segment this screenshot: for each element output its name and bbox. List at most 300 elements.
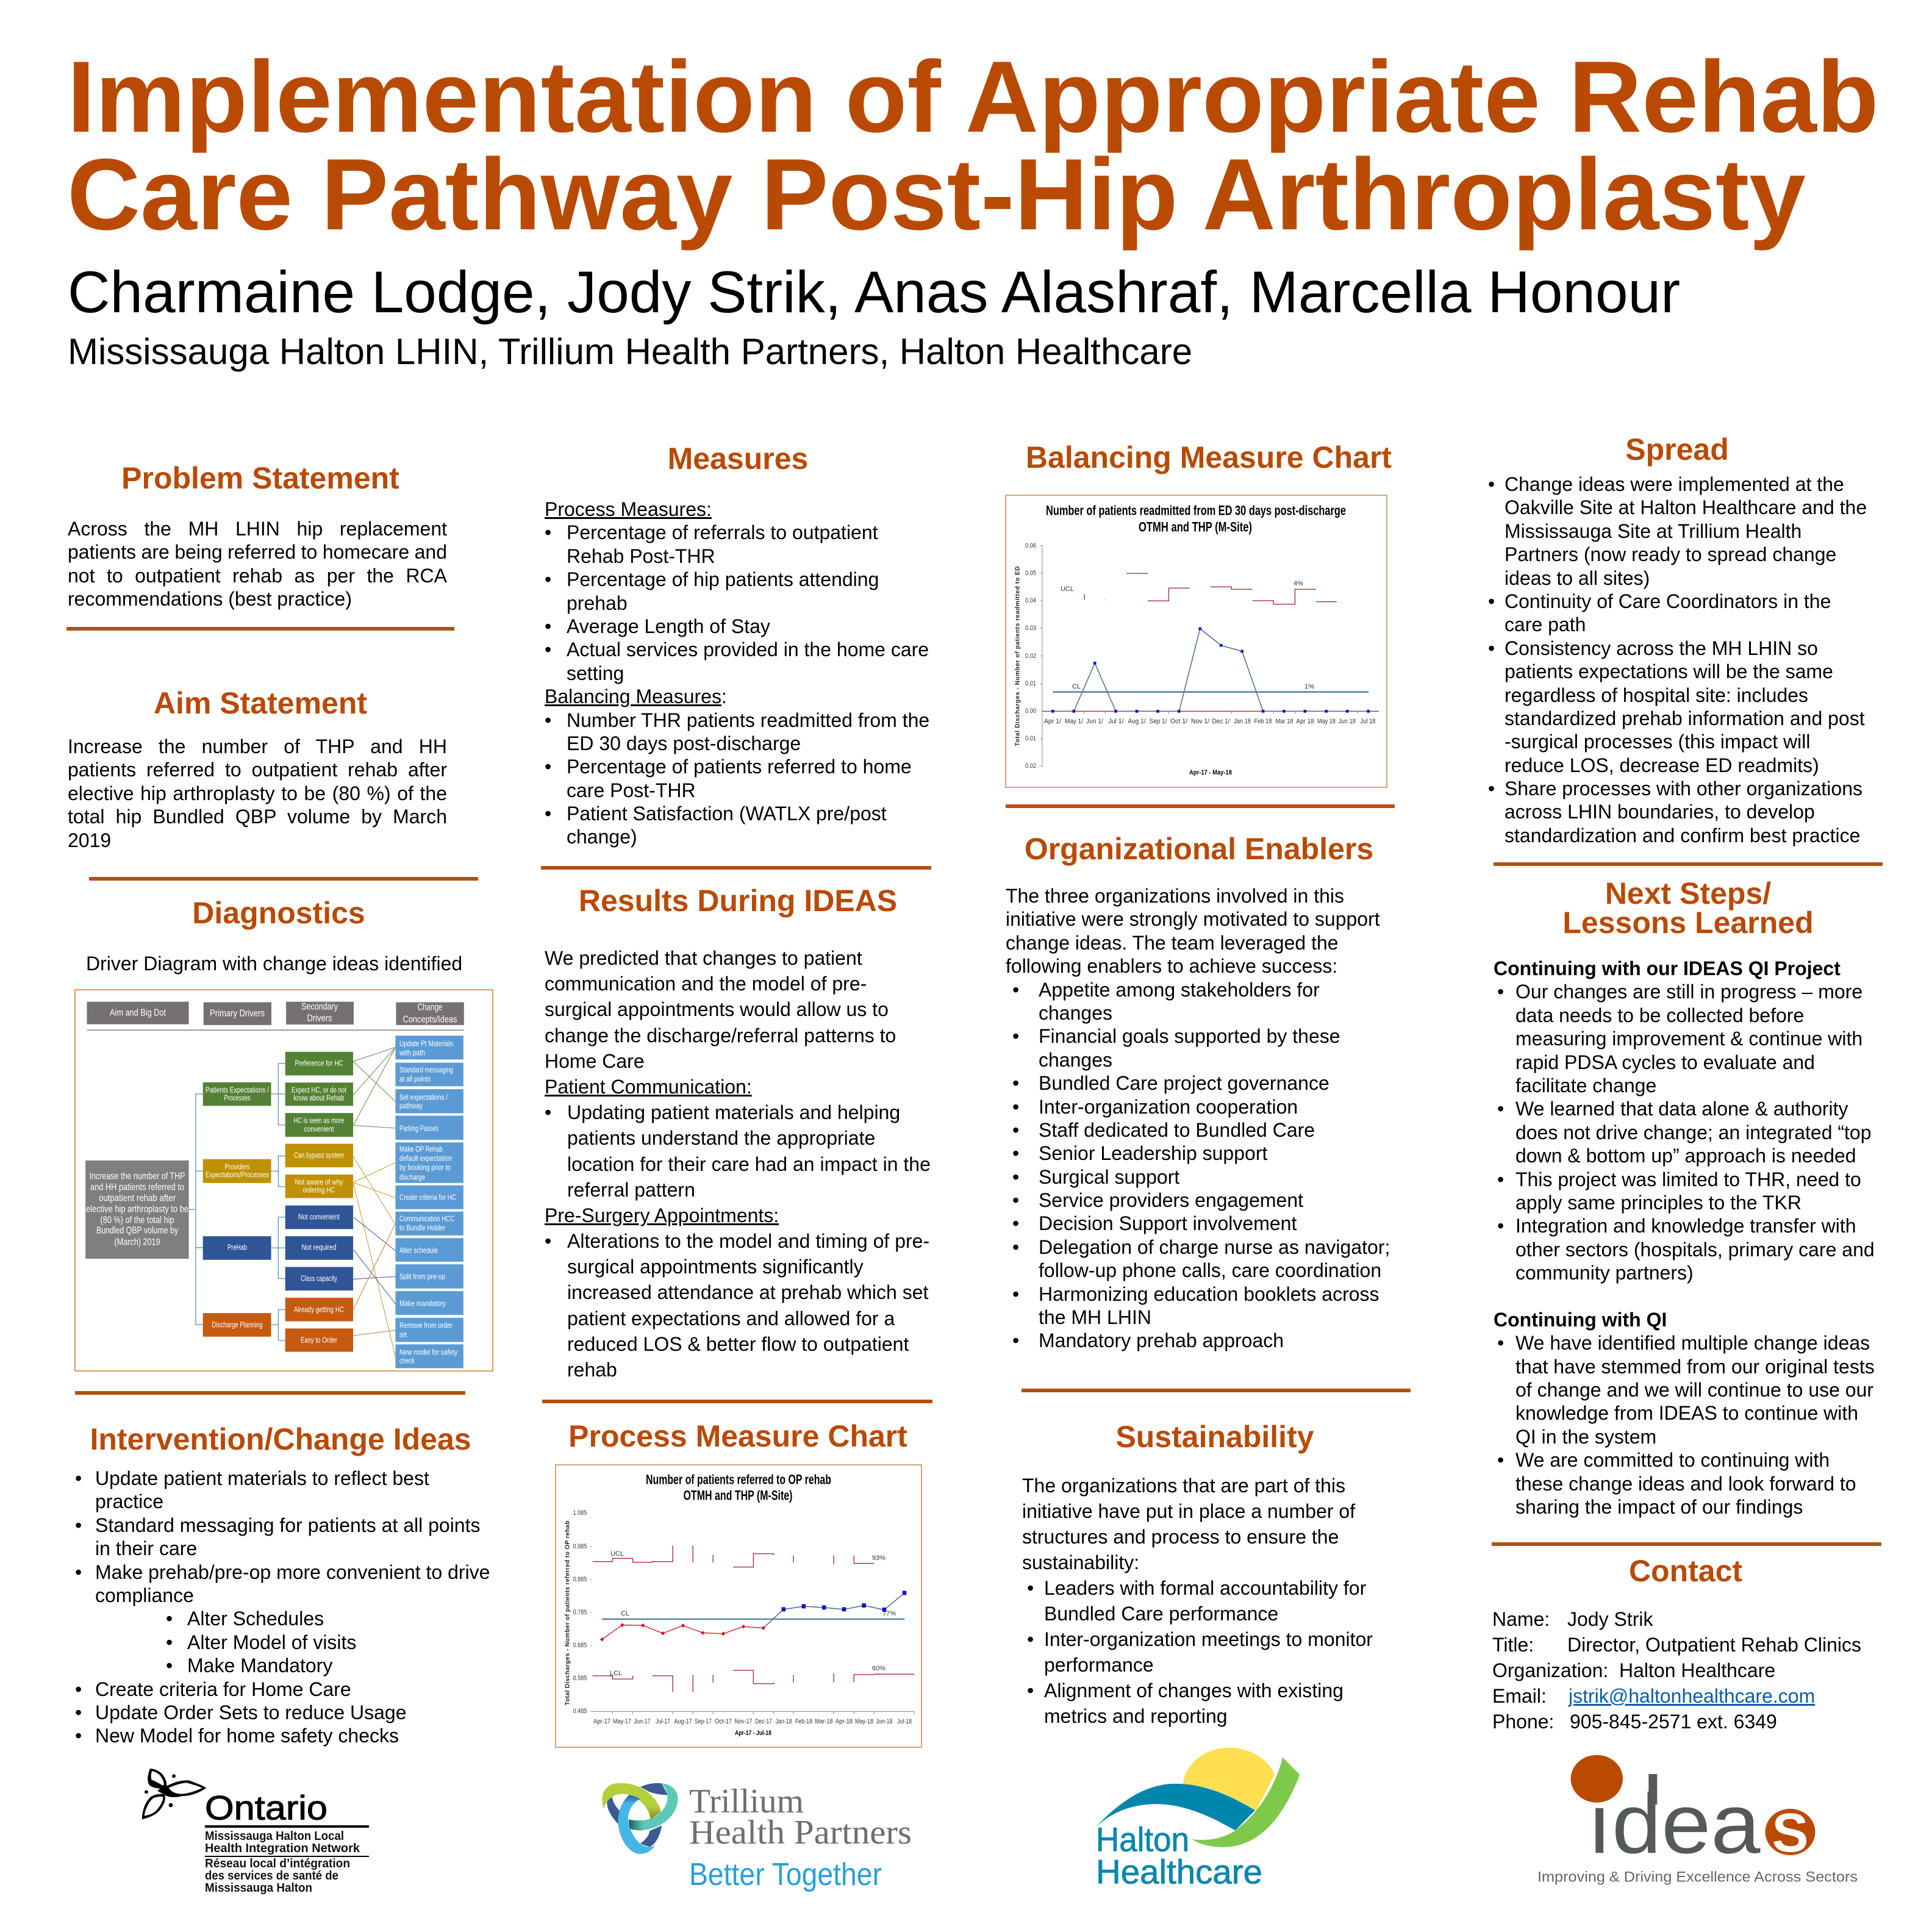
- chart: driver diagram: Preference for HC: [295, 1059, 343, 1067]
- list: spread: reduce LOS, decrease ED readmits): [1504, 754, 1819, 776]
- chart: process measure run chart: Sep-17: [695, 1718, 712, 1725]
- text: contact details: Director, Outpatient Rehab Clinics: [1567, 1634, 1861, 1656]
- text: results: location for their care had an impact in the: [567, 1153, 931, 1175]
- list: measures: •: [545, 615, 551, 637]
- list: organizational enablers: Staff dedicated to Bundled Care: [1039, 1119, 1315, 1141]
- list: organizational enablers: The three organizations involved in this: [1006, 885, 1344, 907]
- chart: driver diagram: Primary Drivers: [210, 1009, 265, 1018]
- chart: driver diagram: Discharge Planning: [212, 1320, 262, 1329]
- list: organizational enablers: Financial goals supported by these: [1039, 1025, 1340, 1047]
- list: next steps: •: [1497, 981, 1504, 1003]
- chart: process measure run chart: Jul-18: [897, 1718, 912, 1725]
- chart: process measure run chart: Apr-17: [593, 1718, 610, 1725]
- chart: driver diagram: HC is seen as more: [294, 1116, 344, 1125]
- chart: driver diagram: Easy to Order: [301, 1336, 337, 1344]
- list: spread: Change ideas were implemented at the: [1504, 473, 1844, 495]
- list: measures: Number THR patients readmitted from the: [567, 709, 929, 731]
- chart: driver diagram: PreHab: [227, 1243, 247, 1251]
- list: measures: Percentage of hip patients attending: [567, 568, 879, 590]
- text: contact details: Name:: [1492, 1608, 1550, 1630]
- list: change ideas: •: [166, 1631, 173, 1653]
- title: [67, 40, 1879, 251]
- chart: balancing measure run chart: Apr 18: [1297, 718, 1314, 725]
- chart: balancing measure run chart: Mar 18: [1276, 718, 1293, 725]
- list: measures: [545, 498, 929, 848]
- list: next steps: knowledge from IDEAS to continue with: [1515, 1402, 1858, 1424]
- logo: Ontario Mississauga Halton LHIN: [142, 1769, 369, 1895]
- chart: driver diagram: Already getting HC: [294, 1305, 344, 1314]
- list: organizational enablers: •: [1012, 1329, 1019, 1351]
- text: results: rehab: [567, 1359, 617, 1381]
- text: results: surgical appointments significantly: [567, 1256, 864, 1278]
- text: problem statement: not to outpatient rehab as per the RCA: [68, 565, 447, 587]
- heading: Diagnostics: Diagnostics: [192, 896, 365, 930]
- chart: driver diagram: at all points: [399, 1075, 431, 1083]
- chart: driver diagram: convenient: [304, 1125, 334, 1133]
- list: spread: patients expectations will be the same: [1504, 660, 1833, 682]
- chart: driver diagram: outpatient rehab after: [99, 1193, 176, 1204]
- chart: balancing measure run chart: 0.00: [1025, 707, 1036, 715]
- list: spread: regardless of hospital site: includes: [1504, 684, 1808, 706]
- chart: driver diagram: Alter schedule: [399, 1245, 438, 1255]
- chart: process measure run chart: Mar-18: [815, 1718, 833, 1725]
- list: spread: •: [1488, 637, 1495, 659]
- chart: driver diagram: check: [399, 1356, 415, 1365]
- list: next steps: apply same principles to the TKR: [1515, 1192, 1801, 1214]
- heading: Problem Statement: Problem Statement: [121, 461, 399, 495]
- list: spread: -surgical processes (this impact will: [1504, 731, 1810, 753]
- chart: driver diagram: Secondary: [301, 1001, 338, 1012]
- list: sustainability: structures and process to ensure the: [1022, 1526, 1339, 1548]
- list: organizational enablers: Service providers engagement: [1039, 1189, 1303, 1211]
- list: measures: Percentage of referrals to outpatient: [567, 521, 878, 543]
- heading: Measures: Measures: [668, 442, 808, 476]
- chart: process measure run chart: 0.485: [573, 1708, 587, 1715]
- list: organizational enablers: •: [1012, 1166, 1019, 1188]
- chart: driver diagram: Standard messaging: [399, 1065, 453, 1075]
- list: change ideas: Create criteria for Home Care: [95, 1678, 351, 1700]
- logo: IDEAS: ıdea: [1587, 1776, 1761, 1871]
- text: contact details: Title:: [1492, 1634, 1534, 1656]
- chart: balancing measure run chart: 0.04: [1025, 597, 1036, 604]
- heading: Sustainability: Sustainability: [1115, 1420, 1314, 1454]
- text: problem statement: Across the MH LHIN hip replacement: [68, 518, 447, 540]
- list: next steps: that have stemmed from our original tests: [1515, 1356, 1875, 1378]
- list: organizational enablers: Mandatory prehab approach: [1039, 1329, 1284, 1351]
- chart: process measure run chart: 60%: [872, 1665, 886, 1672]
- list: measures: care Post-THR: [567, 779, 696, 801]
- list: change ideas: •: [75, 1725, 82, 1747]
- list: next steps: of change and we will continue to use our: [1515, 1379, 1873, 1401]
- list: measures: Rehab Post-THR: [567, 545, 715, 567]
- text: problem statement: [68, 518, 447, 610]
- text: results: change the discharge/referral patterns to: [545, 1025, 896, 1046]
- list: next steps: •: [1497, 1449, 1504, 1471]
- chart: balancing measure run chart: 4%: [1293, 580, 1303, 587]
- text: results: Home Care: [545, 1050, 645, 1072]
- list: next steps: Integration and knowledge transfer with: [1515, 1215, 1856, 1237]
- chart: driver diagram: Parking Passes: [399, 1123, 438, 1133]
- list: next steps: [1494, 957, 1884, 1519]
- chart: process measure run chart: Nov-17: [734, 1718, 753, 1725]
- icon: trillium: [142, 1769, 206, 1819]
- list: organizational enablers: •: [1012, 1142, 1019, 1164]
- text: aim statement: [68, 735, 447, 851]
- list: next steps: does not drive change; an integrated “top: [1515, 1122, 1872, 1143]
- chart: balancing measure run chart: CL: [1072, 683, 1081, 690]
- list: change ideas: Update patient materials to reflect best: [95, 1467, 429, 1489]
- chart: process measure run chart: Jul-17: [656, 1718, 670, 1725]
- list: change ideas: •: [75, 1701, 82, 1723]
- list: measures: •: [545, 521, 551, 543]
- chart: balancing measure run chart: 0.06: [1025, 542, 1036, 549]
- text: driver diagram caption: Driver Diagram with change ideas identified: [86, 953, 462, 975]
- list: next steps: •: [1497, 1332, 1504, 1354]
- list: spread: care path: [1504, 614, 1586, 635]
- list: next steps: these change ideas and look forward to: [1515, 1473, 1856, 1495]
- heading: Next Steps / Lessons Learned: [1560, 879, 1816, 937]
- list: sustainability: •: [1027, 1628, 1034, 1650]
- chart: balancing measure run chart: Total Discharges - Number of patients readmitted to ED: [1015, 566, 1021, 746]
- list: next steps: •: [1497, 1215, 1504, 1237]
- chart: driver diagram: (March) 2019: [115, 1237, 160, 1248]
- chart: process measure run chart: CL: [621, 1610, 629, 1617]
- list: organizational enablers: Delegation of charge nurse as navigator;: [1039, 1236, 1390, 1258]
- chart: driver diagram: (80 %) of the total hip: [100, 1215, 174, 1226]
- chart: driver diagram: elective hip arthroplasty to be: [86, 1204, 188, 1215]
- logo: Halton Healthcare: Healthcare: [1096, 1853, 1262, 1891]
- logo: Ontario Mississauga Halton LHIN: des services de santé de: [205, 1869, 338, 1883]
- text: results: surgical appointments would allow us to: [545, 998, 889, 1020]
- heading: Balancing Measure Chart: Balancing Measure Chart: [1026, 440, 1392, 474]
- list: change ideas: •: [75, 1561, 82, 1583]
- chart: balancing measure run chart: Jun 18: [1339, 718, 1356, 725]
- list: organizational enablers: initiative were strongly motivated to support: [1006, 908, 1380, 930]
- text: contact details: Halton Healthcare: [1619, 1659, 1775, 1681]
- list: sustainability: •: [1027, 1680, 1034, 1701]
- list: change ideas: in their care: [95, 1537, 197, 1559]
- list: change ideas: practice: [95, 1490, 163, 1512]
- list: organizational enablers: following enablers to achieve success:: [1006, 955, 1337, 977]
- list: measures: ED 30 days post-discharge: [567, 732, 801, 754]
- list: change ideas: •: [166, 1655, 173, 1676]
- title: Care Pathway Post-Hip Arthroplasty: [67, 138, 1806, 251]
- logo: Ontario Mississauga Halton LHIN: Mississauga Halton Local: [205, 1830, 344, 1843]
- title: Implementation of Appropriate Rehab: [67, 40, 1879, 154]
- list: organizational enablers: [1006, 885, 1390, 1351]
- heading: Contact: Contact: [1629, 1554, 1742, 1588]
- list: next steps: We learned that data alone & authority: [1515, 1098, 1848, 1120]
- chart: process measure run chart: UCL: [610, 1550, 624, 1558]
- text: aim statement: Increase the number of THP and HH: [68, 735, 447, 757]
- list: organizational enablers: •: [1012, 1096, 1019, 1118]
- list: spread: •: [1488, 473, 1495, 495]
- icon: interlocked rings: [602, 1783, 678, 1854]
- chart: process measure run chart: May-17: [613, 1718, 631, 1725]
- chart: balancing measure run chart: Dec 1/: [1212, 718, 1230, 725]
- list: spread: [1488, 473, 1884, 847]
- text: results: patients understand the appropriate: [567, 1127, 875, 1149]
- chart: process measure run chart: 77%: [882, 1610, 896, 1617]
- chart: driver diagram: to Bundle Holder: [399, 1223, 446, 1232]
- chart: driver diagram: and HH patients referred to: [90, 1182, 184, 1193]
- list: change ideas: •: [166, 1608, 173, 1630]
- list: next steps: rapid PDSA cycles to evaluate and: [1515, 1051, 1815, 1073]
- chart: balancing measure run chart: 0.03: [1025, 624, 1036, 632]
- chart: driver diagram: Class capacity: [301, 1273, 337, 1283]
- list: spread: Consistency across the MH LHIN so: [1504, 637, 1818, 659]
- list: measures: prehab: [567, 592, 628, 614]
- affiliations: Mississauga Halton LHIN, Trillium Health Partners, Halton Healthcare: [68, 331, 1192, 372]
- list: change ideas: Standard messaging for patients at all points: [95, 1514, 480, 1536]
- list: organizational enablers: Senior Leadership support: [1039, 1142, 1267, 1164]
- chart: balancing measure run chart: Apr 1/: [1044, 718, 1062, 725]
- logo: IDEAS: S: [1772, 1803, 1809, 1864]
- chart: driver diagram: Not aware of why: [295, 1177, 343, 1187]
- chart: process measure run chart: [556, 1465, 921, 1747]
- list: organizational enablers: Surgical support: [1039, 1166, 1179, 1188]
- list: change ideas: Update Order Sets to reduce Usage: [95, 1701, 406, 1723]
- logo: Trillium Health Partners: Health Partners: [689, 1814, 912, 1852]
- list: spread: Continuity of Care Coordinators in the: [1504, 590, 1831, 612]
- chart: process measure run chart: Feb-18: [795, 1718, 812, 1725]
- text: results: patient expectations and allowed for a: [567, 1308, 895, 1329]
- logo: Ontario Mississauga Halton LHIN: Health Integration Network: [205, 1842, 360, 1855]
- chart: driver diagram: Remove from order: [399, 1321, 453, 1329]
- chart: process measure run chart: 1.085: [573, 1509, 587, 1517]
- text: contact details: Jody Strik: [1567, 1608, 1653, 1630]
- list: next steps: measuring improvement & continue with: [1515, 1028, 1862, 1050]
- chart: balancing measure run chart: 0.01: [1025, 680, 1036, 687]
- chart: process measure run chart: Aug-17: [674, 1718, 692, 1725]
- chart: balancing measure run chart: OTMH and THP (M-Site): [1139, 520, 1252, 534]
- icon: sun and wave: [1093, 1748, 1300, 1847]
- list: next steps: sharing the impact of our findings: [1515, 1496, 1803, 1518]
- list: measures: Average Length of Stay: [567, 615, 770, 637]
- chart: driver diagram: Not required: [301, 1243, 337, 1251]
- text: results: •: [545, 1101, 551, 1123]
- list: organizational enablers: follow-up phone calls, care coordination: [1039, 1259, 1381, 1281]
- list: sustainability: [1022, 1475, 1373, 1727]
- heading: Next Steps / Lessons Learned: Lessons Learned: [1562, 906, 1814, 940]
- chart: balancing measure run chart: Aug 1/: [1128, 718, 1146, 725]
- text: contact details: Email:: [1492, 1685, 1547, 1707]
- list: sustainability: Alignment of changes with existing: [1044, 1680, 1343, 1701]
- list: measures: Patient Satisfaction (WATLX pre/post: [567, 803, 887, 825]
- list: measures: Process Measures:: [545, 498, 712, 520]
- text: results: Patient Communication:: [545, 1076, 752, 1098]
- list: organizational enablers: •: [1012, 1283, 1019, 1305]
- text: aim statement: total hip Bundled QBP volume by March: [68, 806, 447, 828]
- chart: driver diagram: Concepts/Ideas: [402, 1015, 457, 1025]
- list: measures: •: [545, 639, 551, 660]
- list: spread: standardization and confirm best practice: [1504, 825, 1860, 846]
- logo: Halton Healthcare: Halton: [1096, 1820, 1189, 1859]
- logo: Trillium Health Partners: [602, 1783, 912, 1892]
- list: sustainability: Bundled Care performance: [1044, 1603, 1278, 1625]
- chart: driver diagram: by booking prior to: [399, 1162, 451, 1172]
- list: sustainability: metrics and reporting: [1044, 1705, 1228, 1727]
- list: measures: •: [545, 756, 551, 778]
- list: change ideas: •: [75, 1678, 82, 1700]
- list: spread: Share processes with other organizations: [1504, 778, 1862, 800]
- list: change ideas: Alter Schedules: [187, 1608, 324, 1630]
- chart: balancing measure run chart: [1006, 495, 1387, 787]
- text: contact details: Organization:: [1492, 1659, 1608, 1681]
- text: results: reduced LOS & better flow to outpatient: [567, 1333, 909, 1355]
- list: measures: setting: [567, 662, 624, 684]
- list: next steps: community partners): [1515, 1262, 1694, 1284]
- chart: process measure run chart: 0.785: [573, 1609, 587, 1616]
- chart: process measure run chart: Jun-17: [634, 1718, 650, 1725]
- text: aim statement: 2019: [68, 829, 111, 851]
- chart: driver diagram: set: [399, 1329, 407, 1339]
- chart: process measure run chart: LCL: [610, 1670, 622, 1677]
- list: next steps: This project was limited to THR, need to: [1515, 1168, 1861, 1190]
- chart: driver diagram: default expectation: [399, 1154, 452, 1162]
- list: organizational enablers: Bundled Care project governance: [1039, 1072, 1329, 1094]
- chart: process measure run chart: Apr-18: [835, 1718, 853, 1725]
- logo: Trillium Health Partners: Better Together: [689, 1857, 882, 1892]
- chart: driver diagram: Processes: [224, 1093, 251, 1103]
- text: contact details: 905-845-2571 ext. 6349: [1570, 1711, 1777, 1733]
- chart: process measure run chart: Jan-18: [776, 1718, 792, 1725]
- list: spread: •: [1488, 778, 1495, 800]
- list: organizational enablers: •: [1012, 1025, 1019, 1047]
- chart: driver diagram: Expect HC, or do not: [292, 1086, 346, 1094]
- chart: driver diagram: Communication HCC: [399, 1214, 454, 1223]
- chart: process measure run chart: 0.885: [573, 1576, 587, 1583]
- chart: driver diagram: New model for safety: [399, 1348, 457, 1356]
- logo: IDEAS: [1537, 1755, 1858, 1886]
- list: organizational enablers: Inter-organization cooperation: [1039, 1096, 1298, 1118]
- chart: driver diagram: Make mandatory: [399, 1299, 446, 1308]
- chart: process measure run chart: Number of patients referred to OP rehab: [646, 1472, 831, 1487]
- list: organizational enablers: •: [1012, 1236, 1019, 1258]
- chart: process measure run chart: 0.985: [573, 1543, 587, 1550]
- chart: process measure run chart: Total Discharges - Number of patients referred to OP rehab: [565, 1521, 571, 1705]
- chart: driver diagram: Aim and Big Dot: [110, 1007, 166, 1018]
- chart: process measure run chart: Dec-17: [755, 1718, 772, 1725]
- chart: balancing measure run chart: Apr-17 - May-18: [1189, 769, 1232, 776]
- chart: driver diagram: with path: [399, 1048, 425, 1057]
- list: next steps: data needs to be collected before: [1515, 1004, 1804, 1026]
- list: next steps: Continuing with our IDEAS QI Project: [1494, 957, 1841, 979]
- chart: balancing measure run chart: Number of patients readmitted from ED 30 days post-discharge: [1046, 503, 1346, 518]
- logo: Trillium Health Partners: Trillium: [689, 1783, 804, 1820]
- list: sustainability: The organizations that are part of this: [1022, 1475, 1345, 1497]
- chart: driver diagram: Increase the number of THP: [89, 1171, 185, 1182]
- text: problem statement: patients are being referred to homecare and: [68, 541, 447, 563]
- list: organizational enablers: •: [1012, 1119, 1019, 1141]
- list: spread: Mississauga Site at Trillium Health: [1504, 520, 1801, 542]
- list: next steps: •: [1497, 1168, 1504, 1190]
- text: contact details: Phone:: [1492, 1711, 1554, 1733]
- list: next steps: We have identified multiple change ideas: [1515, 1332, 1870, 1354]
- heading: Intervention/Change Ideas: Intervention/Change Ideas: [90, 1422, 471, 1456]
- chart: process measure run chart: 93%: [872, 1555, 886, 1562]
- chart: process measure run chart: Apr-17 - Jul-18: [735, 1730, 771, 1737]
- text: contact details: [1492, 1606, 1883, 1734]
- heading: Organizational Enablers: Organizational Enablers: [1025, 832, 1373, 866]
- chart: balancing measure run chart: Feb 18: [1254, 718, 1272, 725]
- chart: driver diagram: Can bypass system: [294, 1150, 344, 1160]
- list: change ideas: Make Mandatory: [187, 1655, 332, 1676]
- heading: Spread: Spread: [1625, 432, 1729, 467]
- chart: driver diagram: Create criteria for HC: [399, 1193, 456, 1201]
- logo: Ontario Mississauga Halton LHIN: Réseau local d’intégration: [205, 1857, 350, 1870]
- chart: driver diagram: Drivers: [307, 1014, 332, 1023]
- chart: process measure run chart: Oct-17: [715, 1718, 732, 1725]
- chart: balancing measure run chart: Jan 18: [1234, 718, 1251, 725]
- heading: Next Steps / Lessons Learned: Next Steps/: [1605, 876, 1771, 911]
- chart: balancing measure run chart: 0.02: [1025, 653, 1036, 660]
- chart: balancing measure run chart: Sep 1/: [1149, 718, 1167, 725]
- chart: balancing measure run chart: Jul 1/: [1109, 718, 1124, 725]
- heading: Results During IDEAS: Results During IDEAS: [579, 884, 897, 918]
- chart: driver diagram: Expectations/Processes: [206, 1170, 269, 1179]
- chart: driver diagram: Not convenient: [298, 1212, 340, 1221]
- text: aim statement: elective hip arthroplasty to be (80 %) of the: [68, 782, 447, 804]
- list: next steps: facilitate change: [1515, 1075, 1656, 1097]
- list: change ideas: compliance: [95, 1584, 194, 1606]
- chart: balancing measure run chart: 0.01: [1025, 735, 1036, 742]
- list: measures: •: [545, 803, 551, 825]
- chart: balancing measure run chart: Jul 18: [1360, 718, 1376, 725]
- text: aim statement: patients referred to outpatient rehab after: [68, 759, 447, 781]
- list: organizational enablers: the MH LHIN: [1039, 1306, 1151, 1328]
- text: results: [545, 947, 931, 1381]
- chart: process measure run chart: 0.585: [573, 1675, 587, 1682]
- chart: driver diagram: Split from pre-op: [399, 1272, 445, 1281]
- chart: balancing measure run chart: Nov 1/: [1191, 718, 1210, 725]
- text: results: referral pattern: [567, 1179, 695, 1201]
- chart: balancing measure run chart: UCL: [1061, 585, 1074, 593]
- list: organizational enablers: •: [1012, 1189, 1019, 1211]
- list: next steps: Our changes are still in progress – more: [1515, 981, 1862, 1003]
- list: change ideas: Alter Model of visits: [187, 1631, 356, 1653]
- chart: driver diagram: discharge: [399, 1172, 425, 1182]
- chart: process measure run chart: 0.685: [573, 1642, 587, 1649]
- text: results: Pre-Surgery Appointments:: [545, 1204, 779, 1226]
- list: change ideas: •: [75, 1514, 82, 1536]
- heading: Aim Statement: Aim Statement: [154, 686, 367, 720]
- logo: Halton Healthcare: [1093, 1748, 1300, 1891]
- chart: balancing measure run chart: 0.02: [1025, 762, 1036, 770]
- list: spread: Partners (now ready to spread change: [1504, 543, 1836, 565]
- chart: driver diagram: Update Pt Materials: [399, 1039, 453, 1048]
- list: next steps: We are committed to continuing with: [1515, 1449, 1830, 1471]
- chart: balancing measure run chart: Oct 1/: [1170, 718, 1188, 725]
- chart: balancing measure run chart: 1%: [1304, 683, 1314, 690]
- chart: driver diagram: Make OP Rehab: [399, 1144, 443, 1154]
- list: sustainability: sustainability:: [1022, 1551, 1139, 1573]
- chart: process measure run chart: May-18: [855, 1718, 873, 1725]
- list: measures: Balancing Measures:: [545, 685, 727, 707]
- list: organizational enablers: •: [1012, 1072, 1019, 1094]
- list: next steps: •: [1497, 1098, 1504, 1120]
- list: organizational enablers: •: [1012, 1212, 1019, 1234]
- list: organizational enablers: •: [1012, 979, 1019, 1001]
- text: problem statement: recommendations (best practice): [68, 588, 352, 610]
- list: change ideas: [75, 1467, 490, 1747]
- list: sustainability: Leaders with formal accountability for: [1044, 1577, 1366, 1599]
- list: measures: •: [545, 568, 551, 590]
- list: organizational enablers: change ideas. The team leveraged the: [1006, 932, 1339, 954]
- list: next steps: other sectors (hospitals, primary care and: [1515, 1239, 1875, 1261]
- chart: driver diagram: Providers: [224, 1162, 250, 1171]
- list: next steps: QI in the system: [1515, 1426, 1656, 1448]
